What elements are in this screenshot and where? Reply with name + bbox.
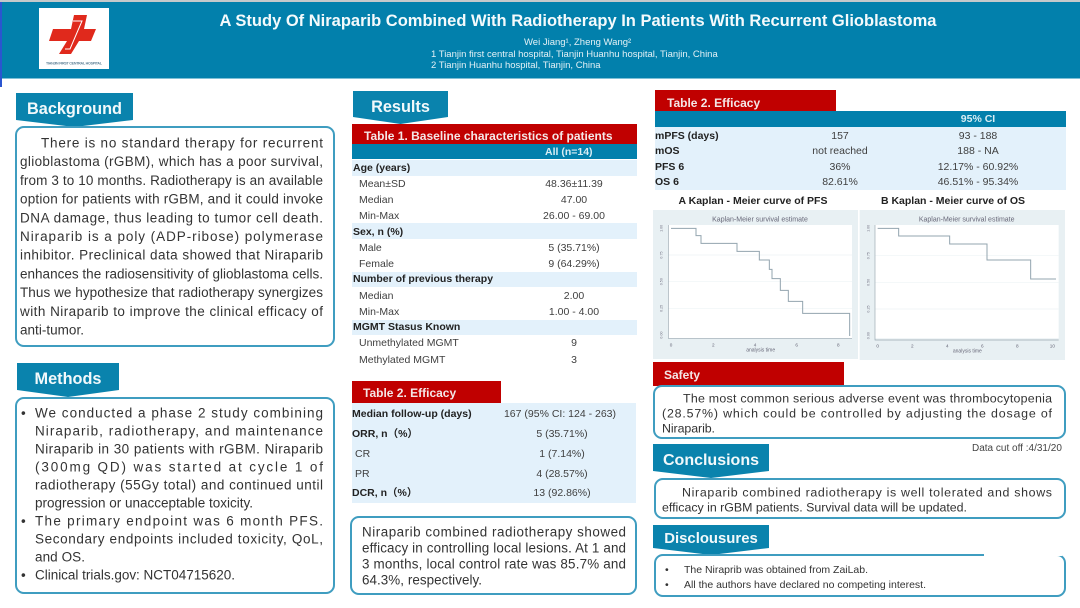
methods list: Clinical trials.gov: NCT04715620. (35, 568, 235, 582)
table 2: efficacy, survival: 188 - NA (957, 145, 999, 157)
table 1: baseline characteristics: 9 (64.29%) (548, 258, 600, 270)
chart: Kaplan-Meier PFS: 0 (670, 343, 673, 348)
table 2: efficacy, response: 1 (7.14%) (539, 448, 585, 460)
disclosures list (665, 564, 926, 591)
methods list: progression or unacceptable toxicity. (35, 496, 253, 510)
chart: Kaplan-Meier OS: 0.25 (866, 305, 870, 313)
heading: Methods: Methods (35, 370, 101, 388)
chart: Kaplan-Meier OS: Kaplan-Meier survival estimate (919, 217, 1015, 224)
background text: anti-tumor. (20, 322, 84, 338)
table 2: efficacy, response: PR (355, 468, 370, 480)
table 1: baseline characteristics: MGMT Stasus Known (353, 321, 460, 333)
panel: disclosures (654, 554, 1066, 597)
methods list: Niraparib, radiotherapy, and maintenance (35, 424, 323, 438)
icon: hospital logo: TIANJIN FIRST CENTRAL HOSPITAL (46, 62, 103, 66)
chart: Kaplan-Meier OS: 10 (1050, 344, 1055, 349)
methods list: radiotherapy (55Gy total) and continued until (35, 478, 323, 492)
table 1: baseline characteristics: Mean±SD (359, 178, 406, 190)
icon: hospital logo (39, 8, 109, 69)
callout text (362, 524, 626, 588)
callout: local control (350, 516, 637, 595)
chart: Kaplan-Meier OS: 0.75 (866, 252, 870, 259)
background text: There is no standard therapy for recurrent (41, 136, 323, 150)
table 1: baseline characteristics: 48.36±11.39 (545, 178, 603, 190)
table 1: baseline characteristics: 26.00 - 69.00 (543, 210, 605, 222)
affiliation 1: 1 Tianjin first central hospital, Tianjin Huanhu hospital, Tianjin, China (431, 49, 718, 60)
heading: Disclosures (653, 525, 769, 555)
heading: Background: Background (27, 100, 122, 118)
background text: inhibitor. Preclinical data showed that Niraparib (20, 248, 323, 263)
background text: from 3 to 10 months. Radiotherapy is an available (20, 173, 323, 188)
table 1: baseline characteristics: Min-Max (359, 306, 399, 318)
table 2: efficacy, survival: 36% (829, 161, 850, 173)
chart: Kaplan-Meier OS: analysis time (953, 349, 982, 355)
table 1 column header (352, 144, 637, 159)
methods list: • (21, 514, 26, 528)
table 1: baseline characteristics: Number of previous therapy (353, 273, 493, 285)
chart: Kaplan-Meier PFS: 0.75 (660, 251, 664, 259)
table 2: efficacy, response: 5 (35.71%) (536, 428, 588, 440)
disclosures list: All the authors have declared no competing interest. (684, 579, 926, 591)
background text: Niraparib is a poly (ADP-ribose) polymerase (20, 229, 323, 244)
table 1: baseline characteristics: Age (years) (353, 162, 410, 174)
table 2: efficacy, survival: mOS (655, 145, 680, 157)
chart: Kaplan-Meier OS: 0.00 (866, 332, 870, 339)
survival table column header: 95% CI (961, 113, 995, 125)
table 1: baseline characteristics: 2.00 (564, 290, 584, 302)
table 2: efficacy, survival: not reached (812, 145, 868, 157)
table 2: efficacy, survival: 12.17% - 60.92% (938, 161, 1018, 173)
chart: Kaplan-Meier PFS: 2 (712, 343, 715, 348)
table 2: efficacy, response: Median follow-up (days) (352, 408, 472, 420)
methods list: • (21, 568, 26, 582)
safety text (662, 392, 1053, 436)
table 1: baseline characteristics: 9 (571, 337, 577, 349)
chart: Kaplan-Meier PFS: analysis time (746, 348, 775, 354)
background text: DNA damage, thus leading to tumor cell death. (20, 210, 323, 225)
conclusions text: efficacy in rGBM patients. Survival data will be updated. (662, 500, 967, 514)
affiliation 2: 2 Tianjin Huanhu hospital, Tianjin, China (431, 60, 601, 71)
disclosures list: • (665, 564, 669, 576)
chart: Kaplan-Meier PFS: Kaplan-Meier survival estimate (712, 217, 808, 224)
table 2: efficacy, survival: OS 6 (655, 176, 679, 188)
panel: safety (653, 385, 1066, 439)
table 1: baseline characteristics (352, 124, 637, 366)
data cut-off note: Data cut off :4/31/20 (972, 443, 1062, 454)
heading: Background (16, 93, 133, 127)
methods list: and OS. (35, 550, 85, 564)
title: A Study Of Niraparib Combined With Radiotherapy In Patients With Recurrent Glioblastoma (220, 12, 936, 30)
methods list: Secondary endpoints included toxicity, QoL, (35, 532, 323, 546)
methods list: Niraparib in 30 patients with rGBM. Niraparib (35, 442, 323, 456)
authors: Wei Jiang¹, Zheng Wang² (524, 37, 631, 48)
survival table column header (655, 111, 1066, 127)
table 2: efficacy, response: CR (355, 448, 370, 460)
table 2: efficacy, survival (655, 90, 1066, 190)
table 1: baseline characteristics: Median (359, 290, 393, 302)
heading: Results: Results (371, 98, 430, 116)
table 2 heading: Table 2. Efficacy (363, 386, 456, 400)
chart: Kaplan-Meier OS: 1.00 (866, 225, 870, 232)
methods list (21, 406, 324, 582)
table 1: baseline characteristics: 47.00 (561, 194, 587, 206)
chart: Kaplan-Meier OS: 4 (946, 344, 949, 349)
safety text: The most common serious adverse event was thrombocytopenia (683, 392, 1052, 406)
safety text: Niraparib. (662, 422, 715, 436)
disclosures list: The Niraprib was obtained from ZaiLab. (684, 564, 868, 576)
callout text: 3 months, local control rate was 85.7% and (362, 556, 626, 572)
heading: Safety (653, 362, 844, 386)
table 1: baseline characteristics: Sex, n (%) (353, 226, 403, 238)
chart: Kaplan-Meier OS: 2 (911, 344, 914, 349)
background text: enhances the radiosensitivity of glioblastoma cells. (20, 266, 323, 281)
table 2: efficacy, response (352, 381, 636, 503)
table 2: efficacy, survival: 82.61% (822, 176, 858, 188)
background text (19, 136, 324, 338)
chart heading A: A Kaplan - Meier curve of PFS (678, 195, 827, 207)
chart heading B: B Kaplan - Meier curve of OS (881, 195, 1025, 207)
table 2: efficacy, response: 167 (95% CI: 124 - 263) (504, 408, 616, 420)
survival table heading: Table 2. Efficacy (667, 96, 760, 110)
background text: Thus we hypothesize that radiotherapy synergizes (20, 285, 323, 300)
callout text: 64.3%, respectively. (362, 572, 482, 588)
chart: Kaplan-Meier PFS: 1.00 (660, 225, 664, 232)
methods list: (300mg QD) was started at cycle 1 of (35, 460, 323, 474)
table 2: efficacy, survival: 46.51% - 95.34% (938, 176, 1018, 188)
table 1 heading (352, 124, 637, 145)
panel: methods (15, 397, 335, 594)
table 1: baseline characteristics: Methylated MGMT (359, 354, 445, 366)
table 1: baseline characteristics: Female (359, 258, 394, 270)
table 2: efficacy, response: DCR, n（%） (352, 487, 417, 499)
heading: Conclusions: Conclusions (663, 452, 759, 469)
table 1: baseline characteristics: 5 (35.71%) (548, 242, 600, 254)
table 2: efficacy, survival: PFS 6 (655, 161, 684, 173)
chart: Kaplan-Meier PFS: 8 (837, 343, 840, 348)
watermark smudge (984, 552, 1062, 556)
table 1: baseline characteristics: Min-Max (359, 210, 399, 222)
heading: Results (353, 91, 448, 124)
chart: Kaplan-Meier OS (860, 210, 1065, 360)
background text: with Niraparib to improve the clinical efficacy of (19, 304, 323, 319)
conclusions text (662, 486, 1052, 514)
heading: Safety: Safety (664, 368, 700, 382)
table 2: efficacy, survival: 157 (831, 130, 849, 142)
table 2 heading (352, 381, 501, 403)
heading: Methods (17, 363, 119, 397)
chart: Kaplan-Meier PFS: 0.50 (660, 278, 664, 285)
methods list: The primary endpoint was 6 month PFS. (35, 514, 323, 528)
table 1: baseline characteristics: Male (359, 242, 382, 254)
callout text: Niraparib combined radiotherapy showed (362, 524, 626, 540)
chart: Kaplan-Meier PFS: 0.25 (660, 305, 664, 312)
chart: Kaplan-Meier OS: 6 (981, 344, 984, 349)
table 2: efficacy, survival: mPFS (days) (655, 130, 719, 142)
methods list: We conducted a phase 2 study combining (35, 406, 323, 420)
table 2: efficacy, response: 13 (92.86%) (533, 487, 591, 499)
chart: Kaplan-Meier PFS: 6 (795, 343, 798, 348)
table 1: baseline characteristics: 3 (571, 354, 577, 366)
table 1: baseline characteristics: Median (359, 194, 393, 206)
table 1: baseline characteristics: Unmethylated MGMT (359, 337, 459, 349)
heading: Conclusions (653, 444, 769, 478)
table 1 heading: Table 1. Baseline characteristics of patients (364, 129, 613, 143)
heading: Disclosures: Disclousures (664, 531, 758, 547)
survival table heading (655, 90, 836, 112)
chart: Kaplan-Meier PFS: 0.00 (660, 331, 664, 339)
chart: Kaplan-Meier PFS (653, 210, 858, 359)
background text: glioblastoma (rGBM), which has a poor survival, (20, 154, 323, 169)
background text: option for patients with rGBM, and it could invoke (20, 192, 323, 207)
methods list: • (21, 406, 26, 420)
safety text: (28.57%) which could be controlled by adjusting the dosage of (662, 406, 1053, 420)
table 1 column header: All (n=14) (545, 146, 593, 158)
disclosures list: • (665, 579, 669, 591)
panel: conclusions (654, 478, 1066, 519)
chart: Kaplan-Meier OS: 0 (876, 344, 879, 349)
conclusions text: Niraparib combined radiotherapy is well tolerated and shows (682, 486, 1052, 500)
chart: Kaplan-Meier OS: 8 (1016, 344, 1019, 349)
table 2: efficacy, response: ORR, n（%） (352, 428, 418, 440)
header banner (0, 0, 1080, 79)
table 2: efficacy, response: 4 (28.57%) (536, 468, 588, 480)
table 2: efficacy, survival: 93 - 188 (959, 130, 997, 142)
chart: Kaplan-Meier PFS: 4 (754, 343, 757, 348)
callout text: efficacy in controlling local lesions. At 1 and (362, 540, 626, 556)
table 1: baseline characteristics: 1.00 - 4.00 (549, 306, 599, 318)
left edge stripe (0, 2, 2, 87)
panel: background (15, 126, 335, 347)
chart: Kaplan-Meier OS: 0.50 (866, 279, 870, 286)
